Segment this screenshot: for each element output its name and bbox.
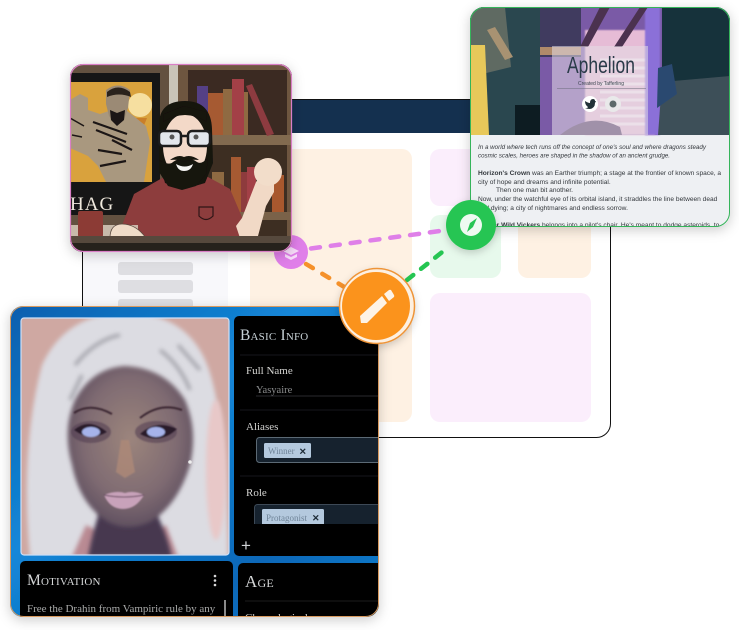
- field: role: Role: [246, 487, 267, 499]
- host character: [118, 101, 282, 238]
- panel: age: [238, 563, 384, 624]
- window header bar: [292, 100, 470, 133]
- hair: [27, 313, 228, 557]
- icon: second social button: [605, 96, 621, 112]
- poster caption: HAG: [70, 194, 114, 215]
- story text: and dying; a city of nightmares and endless sorrow.: [478, 205, 628, 212]
- add button: +: [241, 536, 251, 555]
- panel: motivation: [20, 561, 233, 621]
- icon: green compass node: [446, 200, 496, 250]
- story text: cosmic scales, heroes are shaped in the shadow of an ancient grudge.: [478, 152, 670, 160]
- sidebar: [118, 262, 193, 306]
- story text: Horizon's Crown was an Earther triumph; a stage at the frontier of known space, a: [478, 170, 721, 177]
- field: aliases: Aliases: [246, 421, 278, 433]
- neck: [86, 512, 174, 554]
- story text: Hunter Wild Vickers belongs into a pilot's chair. He's meant to dodge asteroids, to: [478, 222, 720, 229]
- face: [68, 366, 193, 527]
- icon: twitter button: [582, 96, 598, 112]
- clothing: [72, 525, 178, 557]
- icon: orange pencil node: [340, 268, 414, 344]
- field: aliases: Winner: [268, 446, 295, 456]
- nose and lips: [104, 440, 144, 509]
- eyes and brows: [71, 407, 182, 443]
- title panel: Aphelion: [567, 52, 635, 78]
- field: full name: [246, 365, 379, 396]
- portrait: [21, 313, 229, 557]
- heading: age: Age: [245, 572, 274, 591]
- tile: small pink: [430, 149, 470, 206]
- title panel: Created by Tafferling: [578, 81, 624, 87]
- app window wireframe: [82, 99, 610, 438]
- card: cartoon video host: [70, 64, 292, 252]
- story text: Then one man bit another.: [496, 187, 573, 194]
- card: character sheet: [10, 306, 386, 624]
- poster: [70, 73, 160, 215]
- field: role: [246, 489, 378, 524]
- title panel: [552, 46, 648, 135]
- mug and desk: [70, 211, 292, 252]
- tile: small orange: [518, 227, 591, 278]
- icon: more menu: [214, 575, 216, 586]
- field: aliases: ✕: [299, 446, 307, 456]
- field: full name: Yasyaire: [256, 385, 293, 396]
- field: aliases: [246, 421, 386, 462]
- field: role: ✕: [312, 513, 320, 523]
- tile: tall orange: [250, 149, 412, 422]
- motivation text: Free the Drahin from Vampiric rule by any: [27, 603, 216, 615]
- connector: green dashed: [407, 249, 446, 280]
- age field label: Chronological: [245, 612, 308, 624]
- card: Aphelion story page: [470, 7, 730, 229]
- story text: [478, 144, 721, 229]
- story text: Now, under the watchful eye of its orbital island, it straddles the line between dead: [478, 196, 718, 203]
- tile: small green: [430, 215, 501, 278]
- tile: large pink: [430, 293, 591, 422]
- heading: motivation: Motivation: [27, 572, 101, 589]
- heading: basic info: Basic Info: [240, 327, 308, 344]
- panel: basic info: [234, 316, 386, 556]
- field: role: Protagonist: [266, 513, 308, 523]
- field: full name: Full Name: [246, 365, 293, 377]
- connector: pink dashed: [311, 231, 440, 248]
- cover illustration: [470, 7, 730, 135]
- story text: city of hope and dreams and infinite potential.: [478, 179, 611, 186]
- books: [197, 79, 284, 212]
- story text: In a world where tech runs off the concept of one's soul and where dragons steady: [478, 144, 707, 151]
- connector: orange dashed: [306, 264, 346, 288]
- wall and bookcase: [70, 64, 292, 239]
- icon: pink graduation cap node: [274, 235, 308, 269]
